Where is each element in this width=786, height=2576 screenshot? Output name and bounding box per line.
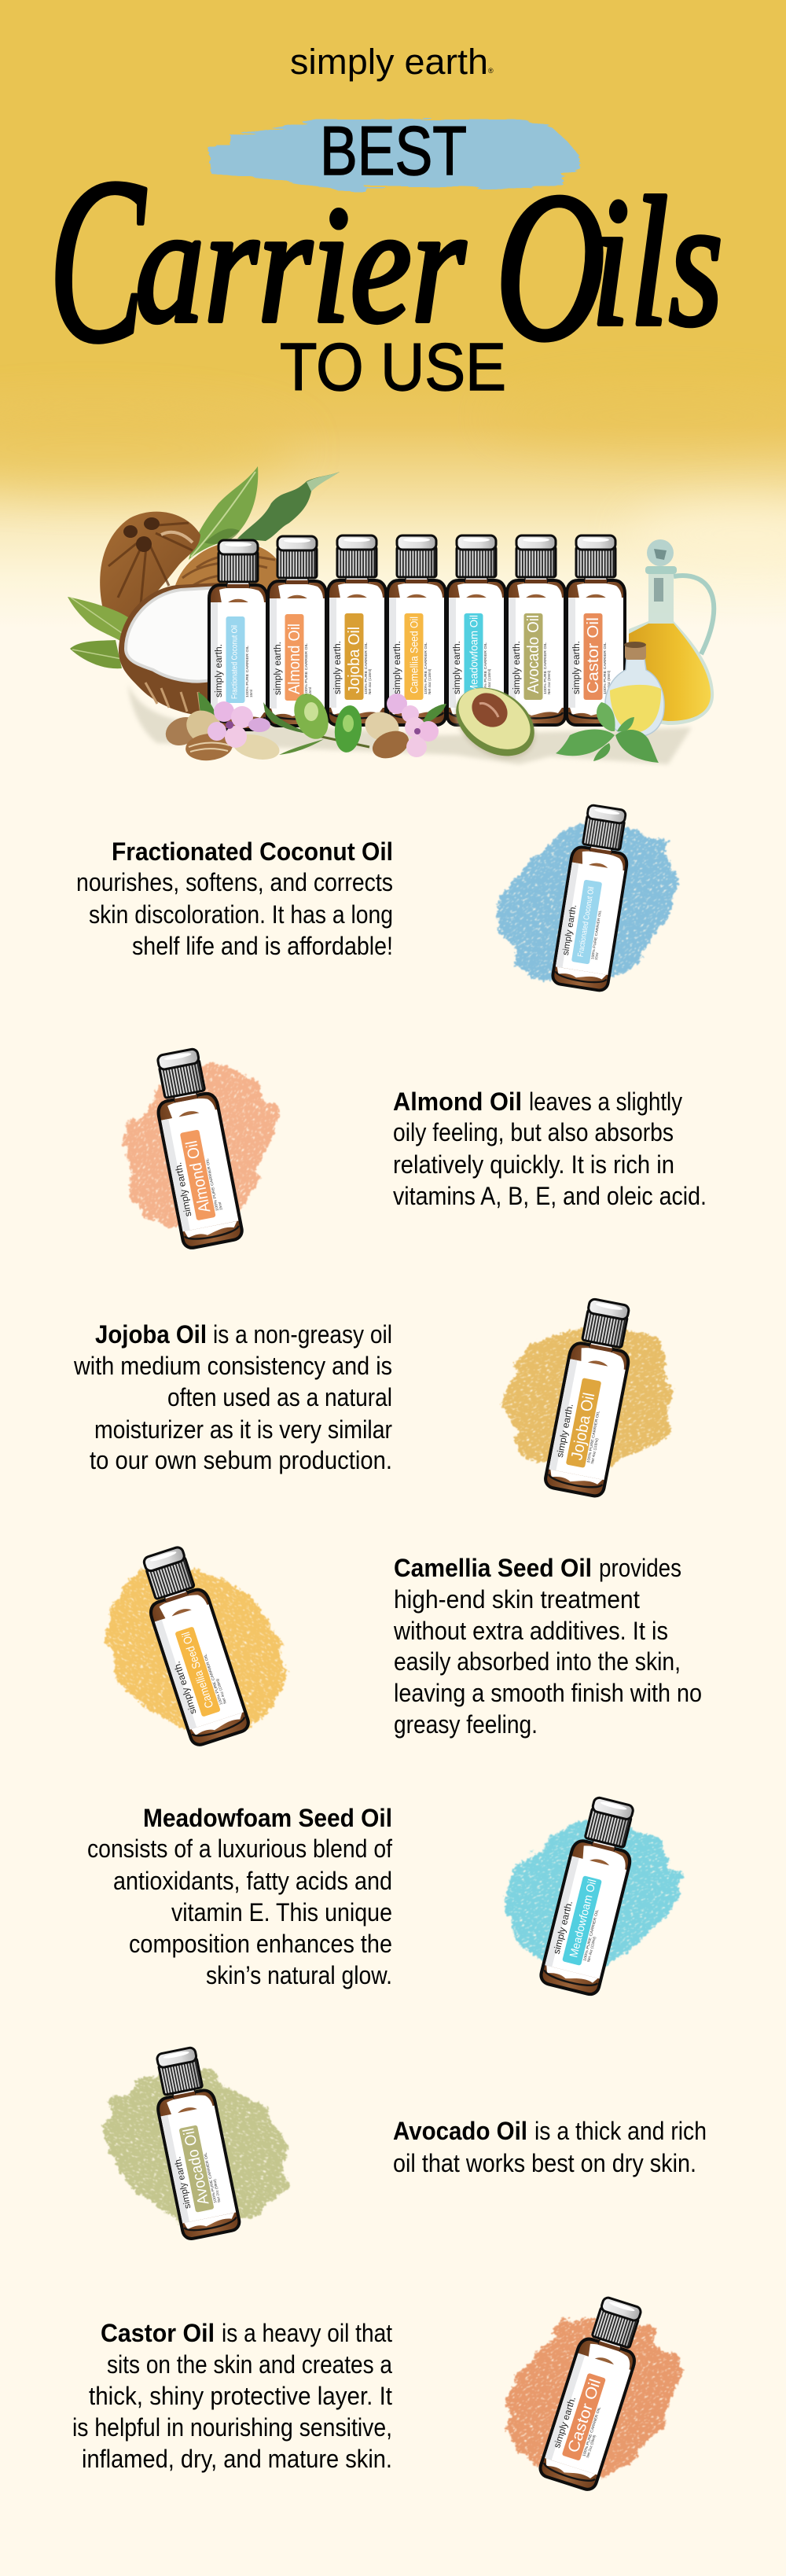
icon: jojoba oil bottle: simply earth.	[555, 1403, 575, 1459]
bottle: fractionated coconut	[209, 540, 267, 730]
text block: jojoba oil: is a non-greasy oil	[213, 1320, 392, 1349]
bottle: avocado: 100% PURE CARRIER OIL	[543, 642, 547, 694]
bottle: fractionated coconut: 100% PURE CARRIER OIL	[245, 645, 249, 697]
icon: green fruit branch	[263, 689, 369, 755]
panel: almond oil	[96, 1041, 707, 1253]
text block: fractionated coconut oil: shelf life and is affordable!	[132, 932, 393, 960]
icon: meadowfoam seed oil bottle: Net 4oz (118ml)	[586, 1936, 597, 1963]
text block: jojoba oil	[73, 1320, 392, 1474]
bottle: camellia seed: Net 4oz (118ml)	[428, 668, 432, 694]
title	[49, 112, 723, 405]
icon: castor oil bottle: 100% PURE CARRIER OIL	[582, 2406, 601, 2457]
panel: meadowfoam seed oil	[87, 1794, 696, 1996]
icon: camellia seed oil bottle: Net 4oz (118ml)	[215, 1678, 228, 1704]
text block: castor oil: is a heavy oil that	[222, 2319, 392, 2347]
title: arrier	[135, 172, 466, 358]
icon: small oil bottle	[605, 642, 664, 737]
bottle: jojoba	[328, 535, 386, 725]
logo: simply earth	[290, 42, 488, 82]
bottle: avocado: Avocado Oil	[525, 615, 542, 694]
icon: almond oil bottle: 15ml	[218, 1202, 224, 1210]
icon: open coconut	[119, 583, 220, 716]
icon: golden paint swatch	[484, 1297, 695, 1494]
text block: fractionated coconut oil	[76, 837, 393, 960]
ground shadows	[128, 684, 692, 764]
header wash	[0, 0, 786, 645]
icon: meadowfoam seed oil bottle: 100% PURE CARRIER OIL	[582, 1908, 599, 1961]
panel: avocado oil	[83, 2044, 707, 2249]
text block: castor oil: thick, shiny protective layer. It	[89, 2382, 392, 2410]
icon: coconut oil bottle	[552, 803, 635, 992]
text block: jojoba oil: to our own sebum production.	[90, 1446, 392, 1474]
bottle: meadowfoam seed: Meadowfoam Oil	[467, 615, 479, 694]
bottle: fractionated coconut: simply earth.	[215, 644, 224, 697]
text block: camellia seed oil: leaving a smooth finish with no	[394, 1679, 702, 1707]
panel: camellia seed oil	[78, 1536, 702, 1766]
bottle: camellia seed: simply earth.	[393, 641, 402, 694]
bottle: almond: 100% PURE CARRIER OIL	[304, 642, 308, 695]
text block: jojoba oil: moisturizer as it is very similar	[94, 1415, 392, 1444]
text block: camellia seed oil: high-end skin treatment	[394, 1585, 640, 1614]
bottle: fractionated coconut: 15ml	[249, 690, 253, 697]
bottle: fractionated coconut: Fractionated Coconut Oil	[230, 625, 239, 699]
icon: orange paint swatch	[96, 1041, 300, 1253]
bottle: avocado: simply earth.	[512, 641, 522, 694]
icon: oil jar	[629, 539, 714, 725]
title: ils	[591, 160, 723, 364]
title: BEST	[320, 112, 467, 190]
bottle: jojoba: Jojoba Oil	[346, 627, 363, 694]
icon: camellia seed oil bottle	[134, 1543, 251, 1747]
text block: almond oil: vitamins A, B, E, and oleic acid.	[393, 1182, 707, 1210]
hero illustration	[68, 466, 714, 773]
text block: fractionated coconut oil: nourishes, softens, and corrects	[76, 868, 393, 896]
text block: jojoba oil: with medium consistency and is	[73, 1352, 392, 1380]
bottles row	[209, 535, 625, 730]
icon: almond oil bottle: 100% PURE CARRIER OIL	[205, 1157, 220, 1211]
bottle: castor: Castor Oil	[585, 617, 602, 694]
icon: blue paint swatch	[472, 791, 705, 1013]
bottle: camellia seed: Camellia Seed Oil	[407, 616, 420, 694]
bottle: almond: 15ml	[308, 687, 312, 695]
icon: avocado oil bottle: Net 2oz (59ml)	[212, 2179, 221, 2202]
icon: olive paint swatch	[83, 2044, 310, 2249]
icon: almond oil bottle: Almond Oil	[182, 1139, 214, 1214]
icon: teal paint swatch	[483, 1800, 696, 1990]
text block: almond oil: Almond Oil	[393, 1087, 522, 1116]
text block: almond oil: oily feeling, but also absorbs	[393, 1118, 674, 1146]
icon: coconut half behind	[174, 542, 280, 598]
icon: castor oil bottle: Net 2oz (59ml)	[586, 2434, 597, 2458]
bottle: castor: simply earth.	[572, 641, 582, 694]
text block: castor oil: inflamed, dry, and mature skin.	[82, 2445, 392, 2473]
icon: avocado oil bottle: Avocado Oil	[180, 2126, 212, 2206]
text block: camellia seed oil	[393, 1554, 702, 1739]
icon: jojoba oil bottle: Net 4oz (118ml)	[590, 1437, 599, 1464]
text block: meadowfoam seed oil	[87, 1804, 392, 1989]
icon: blue brush stroke	[208, 120, 579, 192]
icon: avocado oil bottle: 100% PURE CARRIER OIL	[203, 2152, 217, 2203]
text block: avocado oil: is a thick and rich	[534, 2117, 707, 2145]
bottle: jojoba: 100% PURE CARRIER OIL	[364, 642, 368, 694]
text block: meadowfoam seed oil: Meadowfoam Seed Oil	[143, 1804, 392, 1832]
text block: meadowfoam seed oil: composition enhances the	[129, 1930, 392, 1958]
text block: camellia seed oil: Camellia Seed Oil	[394, 1554, 592, 1582]
icon: meadowfoam seed oil bottle: simply earth.	[552, 1900, 575, 1955]
icon: castor oil bottle: simply earth.	[553, 2396, 578, 2449]
icon: long leaf	[189, 466, 258, 560]
icon: meadowfoam seed oil bottle: Meadowfoam Oil	[567, 1878, 599, 1959]
panel: castor oil	[72, 2291, 703, 2503]
icon: castor oil bottle	[538, 2294, 651, 2492]
icon: almonds and blossom	[161, 692, 281, 764]
text block: camellia seed oil: provides	[599, 1554, 681, 1582]
text block: avocado oil: Avocado Oil	[393, 2117, 527, 2145]
text block: avocado oil	[393, 2117, 707, 2177]
bottle: castor	[567, 535, 625, 725]
text block: castor oil: Castor Oil	[101, 2319, 215, 2347]
text block: jojoba oil: Jojoba Oil	[95, 1320, 207, 1349]
bottle: camellia seed: 100% PURE CARRIER OIL	[424, 642, 428, 694]
icon: coconut oil bottle: 15ml	[594, 952, 599, 960]
icon: avocado oil bottle: simply earth.	[173, 2156, 193, 2210]
text block: camellia seed oil: easily absorbed into the skin,	[394, 1647, 681, 1676]
panel: fractionated coconut oil	[76, 791, 705, 1013]
icon: meadowfoam seed oil bottle	[539, 1794, 644, 1996]
text block: fractionated coconut oil: Fractionated Coconut Oil	[112, 837, 393, 866]
icon: almonds and blossom right	[361, 694, 446, 764]
bottle: castor: 100% PURE CARRIER OIL	[603, 642, 607, 694]
icon: whole coconut	[100, 512, 200, 623]
bottle: meadowfoam seed	[447, 535, 505, 725]
text block: fractionated coconut oil: skin discoloration. It has a long	[89, 900, 393, 929]
icon: terracotta paint swatch	[476, 2291, 703, 2503]
icon: almond oil bottle: simply earth.	[172, 1161, 193, 1217]
icon: coconut oil bottle: 100% PURE CARRIER OIL	[590, 910, 602, 960]
bottle: jojoba: Net 4oz (118ml)	[368, 668, 372, 694]
text block: almond oil	[393, 1087, 707, 1210]
icon: jojoba oil bottle: Jojoba Oil	[568, 1391, 598, 1462]
text block: meadowfoam seed oil: antioxidants, fatty acids and	[113, 1867, 392, 1895]
text block: almond oil: leaves a slightly	[529, 1087, 682, 1116]
bottle: camellia seed	[387, 535, 446, 725]
icon: avocado half	[443, 674, 548, 773]
text block: castor oil: is helpful in nourishing sensitive,	[72, 2413, 392, 2442]
icon: mint leaves	[556, 702, 659, 763]
bottle: jojoba: simply earth.	[333, 641, 343, 694]
icon: yellow paint swatch	[78, 1536, 315, 1766]
icon: camellia seed oil bottle: 100% PURE CARRIER OIL	[203, 1653, 224, 1706]
bottle: avocado: Net 2oz (59ml)	[547, 670, 551, 694]
bottle: castor: Net 2oz (59ml)	[607, 670, 611, 694]
text block: meadowfoam seed oil: consists of a luxurious blend of	[87, 1834, 392, 1863]
icon: jojoba oil bottle	[544, 1297, 639, 1498]
text block: castor oil	[72, 2319, 392, 2473]
bottle: meadowfoam seed: 100% PURE CARRIER OIL	[483, 642, 487, 694]
icon: camellia seed oil bottle: Camellia Seed Oil	[180, 1630, 216, 1709]
icon: green leaves left	[68, 597, 130, 668]
title: TO USE	[280, 330, 506, 405]
title: C	[49, 130, 148, 391]
text block: camellia seed oil: without extra additives. It is	[393, 1617, 668, 1645]
icon: coconut oil bottle: Fractionated Coconut Oil	[576, 886, 596, 958]
bottle: avocado	[507, 535, 565, 725]
title: O	[495, 149, 605, 385]
text block: jojoba oil: often used as a natural	[167, 1383, 392, 1411]
bottle: almond	[268, 536, 326, 726]
icon: dark wavy leaf	[237, 472, 340, 541]
text block: castor oil: sits on the skin and creates a	[107, 2350, 392, 2379]
icon: avocado oil bottle	[147, 2045, 241, 2240]
bottle: meadowfoam seed: simply earth.	[453, 641, 462, 694]
text block: avocado oil: oil that works best on dry skin.	[393, 2149, 696, 2177]
icon: coconut oil bottle: simply earth.	[561, 903, 578, 956]
text block: meadowfoam seed oil: vitamin E. This unique	[171, 1898, 392, 1926]
panel: jojoba oil	[73, 1297, 695, 1498]
bottle: almond: simply earth.	[274, 642, 283, 695]
text block: meadowfoam seed oil: skin’s natural glow.	[206, 1961, 392, 1989]
icon: castor oil bottle: Castor Oil	[565, 2377, 604, 2455]
bottle: almond: Almond Oil	[286, 624, 303, 694]
text block: camellia seed oil: greasy feeling.	[394, 1710, 538, 1739]
bottle: meadowfoam seed: Net 4oz (118ml)	[487, 668, 491, 694]
icon: jojoba oil bottle: 100% PURE CARRIER OIL	[586, 1410, 601, 1463]
text block: almond oil: relatively quickly. It is rich in	[393, 1150, 674, 1179]
icon: almond oil bottle	[148, 1047, 244, 1249]
icon: camellia seed oil bottle: simply earth.	[171, 1660, 199, 1716]
logo: ®	[488, 67, 494, 75]
